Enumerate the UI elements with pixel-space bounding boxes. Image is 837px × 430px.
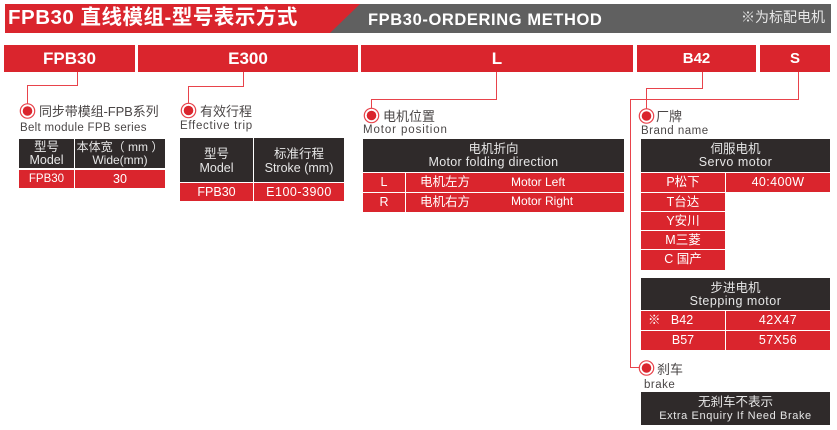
table: stepping motor: 42X47 <box>759 313 797 327</box>
table: servo motor: P松下 <box>666 175 700 189</box>
table: motor folding direction: 电机折向 <box>468 142 518 156</box>
table: motor folding direction: Motor Right <box>511 194 573 208</box>
code bar: E300 <box>138 45 358 72</box>
table: servo motor: M三菱 <box>665 233 701 247</box>
table: motor folding direction: L <box>381 175 387 189</box>
table: model and stroke: 型号 <box>204 147 229 161</box>
table: model and width: 本体宽（ mm ） <box>77 140 163 154</box>
label: brand name: Brand name <box>641 125 709 137</box>
table: model and stroke: E100-3900 <box>266 185 332 199</box>
table: servo motor: Y安川 <box>666 214 700 228</box>
table: motor folding direction <box>363 139 624 212</box>
table: model and width: FPB30 <box>29 173 64 185</box>
table: stepping motor <box>641 278 830 350</box>
table: stepping motor: 步进电机 <box>710 281 760 295</box>
table: motor folding direction: 电机左方 <box>420 175 470 189</box>
note: standard motor: ※为标配电机 <box>741 9 825 25</box>
code bar: FPB30 <box>4 45 135 72</box>
table: servo motor: 伺服电机 <box>710 142 760 156</box>
table: servo motor: C 国产 <box>664 252 702 266</box>
label: brake: 刹车 <box>657 362 683 377</box>
code bar: L <box>361 45 633 72</box>
label: effective trip: Effective trip <box>180 120 253 132</box>
table: stepping motor: Stepping motor <box>690 294 781 308</box>
table: brake note: 无刹车不表示 <box>698 395 773 409</box>
table: motor folding direction: Motor folding direction <box>429 155 558 169</box>
table: model and stroke: Stroke (mm) <box>265 161 333 175</box>
label: brand name <box>641 109 709 137</box>
table: servo motor: Servo motor <box>699 155 772 169</box>
table: model and stroke: Model <box>199 161 234 175</box>
code bar: B42 <box>637 45 756 72</box>
table: brake note: Extra Enquiry If Need Brake <box>659 410 812 422</box>
code bar: S <box>760 45 830 72</box>
title: Chinese: FPB30 直线模组-型号表示方式 <box>8 6 298 29</box>
code bar: L: L <box>492 49 502 68</box>
table: model and width: Wide(mm) <box>92 153 148 167</box>
label: motor position: 电机位置 <box>383 109 435 124</box>
table: model and width: 30 <box>113 172 127 186</box>
label: effective trip <box>180 104 253 132</box>
table: motor folding direction: Motor Left <box>511 175 565 189</box>
table: model and stroke <box>180 138 344 201</box>
table: servo motor: T台达 <box>667 195 699 209</box>
table: stepping motor: B57 <box>672 333 694 347</box>
label: effective trip: 有效行程 <box>200 104 252 119</box>
title banner <box>5 4 831 33</box>
table: model and width: 型号 <box>34 140 59 154</box>
table: motor folding direction: 电机右方 <box>420 195 470 209</box>
table: model and stroke: 标准行程 <box>274 147 324 161</box>
table: servo motor: 40:400W <box>752 175 804 189</box>
label: brand name: 厂牌 <box>656 109 682 124</box>
table: stepping motor: ※ B42 <box>648 313 693 327</box>
table: model and width <box>19 139 165 188</box>
table: model and stroke: FPB30 <box>197 185 236 199</box>
code bar: E300: E300 <box>228 49 268 68</box>
label: brake <box>644 362 683 391</box>
title: English: FPB30-ORDERING METHOD <box>368 11 602 29</box>
table: motor folding direction: R <box>379 195 389 209</box>
label: motor position <box>363 109 448 136</box>
code bar: B42: B42 <box>683 50 710 67</box>
table: servo motor <box>641 139 830 270</box>
code bar: S: S <box>790 50 800 67</box>
table: stepping motor: 57X56 <box>759 333 797 347</box>
label: belt module: Belt module FPB series <box>20 122 147 134</box>
label: brake: brake <box>644 379 675 391</box>
label: motor position: Motor position <box>363 124 448 136</box>
table: model and width: Model <box>29 153 64 167</box>
code bar: FPB30: FPB30 <box>43 49 96 68</box>
label: belt module: 同步带模组-FPB系列 <box>39 104 159 119</box>
table: brake note <box>641 392 830 425</box>
label: belt module <box>20 104 159 134</box>
